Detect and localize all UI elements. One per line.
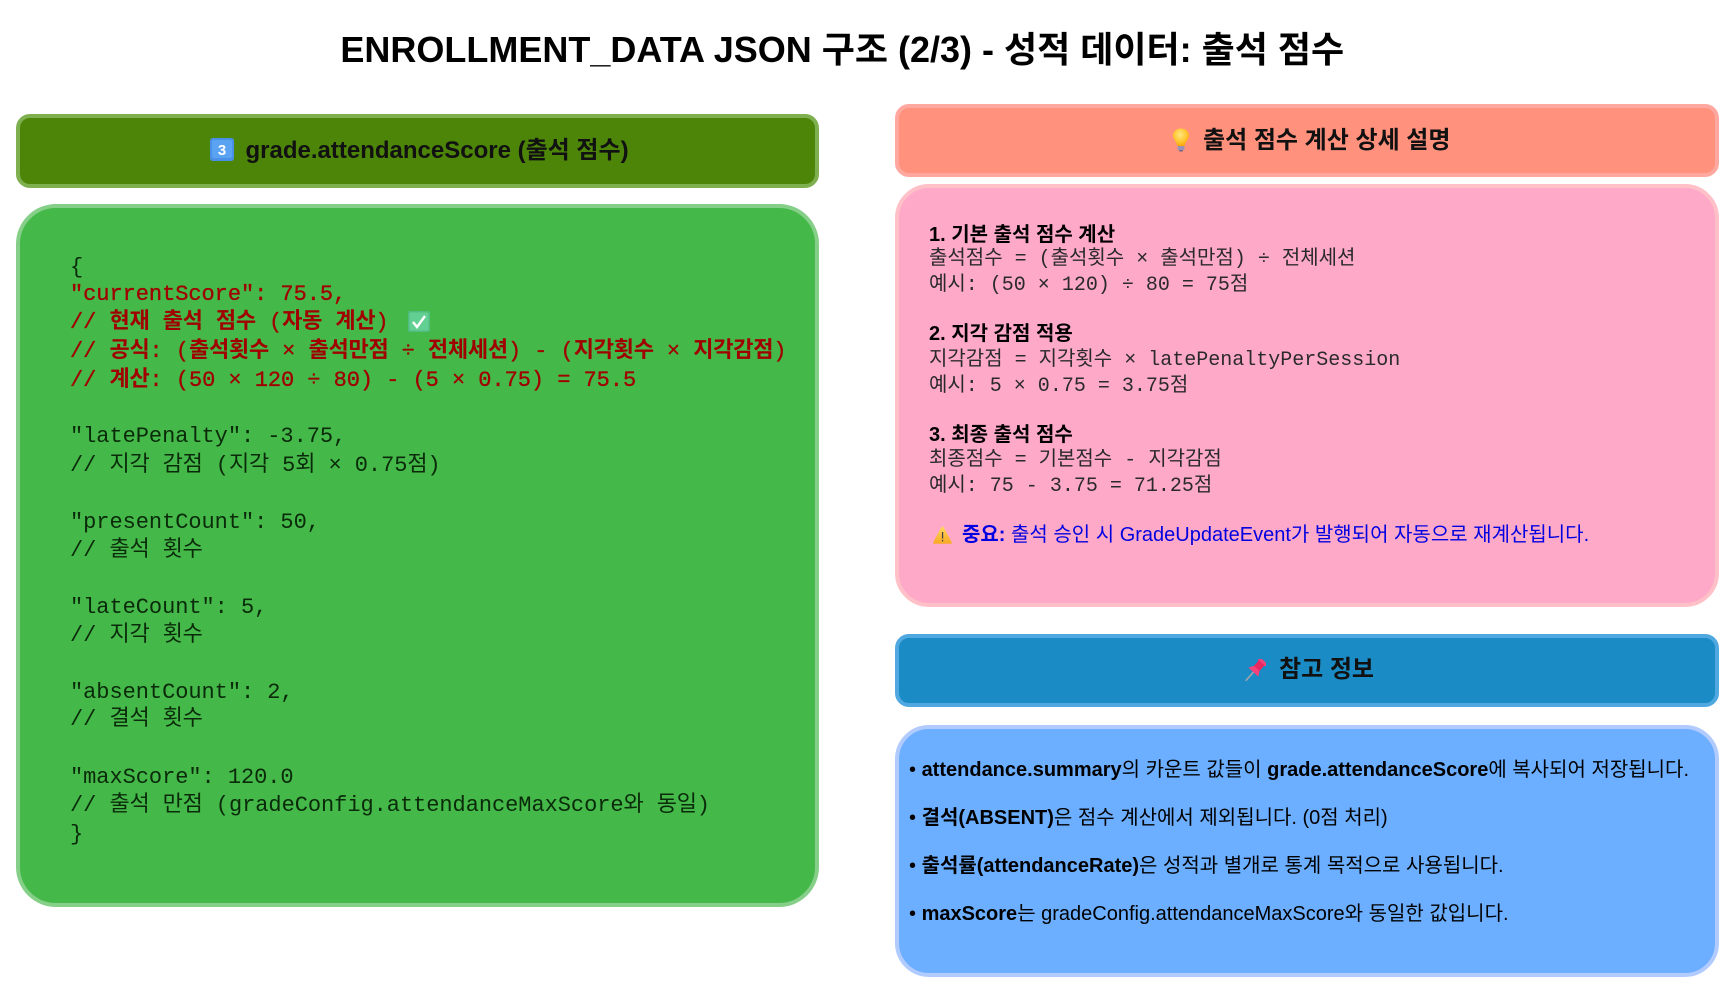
text block: calculation steps: 최종점수 = 기본점수 - 지각감점 xyxy=(929,449,1222,472)
code block: attendance score JSON: // 지각 횟수 xyxy=(70,623,203,648)
panel header: reference info xyxy=(895,634,1719,707)
code block: attendance score JSON xyxy=(70,255,786,847)
code block: attendance score JSON: "latePenalty": -3.75, xyxy=(70,424,346,449)
text block: calculation steps: 1. 기본 출석 점수 계산 xyxy=(929,224,1115,246)
heading: calculation details: 출석 점수 계산 상세 설명 xyxy=(1203,126,1450,154)
code block: attendance score JSON: // 결석 횟수 xyxy=(70,707,203,732)
code block: attendance score JSON: // 공식: (출석횟수 × 출석만점 ÷ 전체세션) - (지각횟수 × 지각감점) xyxy=(70,339,786,364)
heading: reference info: 참고 정보 xyxy=(1279,656,1374,683)
icon: keycap 3: 3 xyxy=(218,142,226,159)
text block: calculation steps: 3. 최종 출석 점수 xyxy=(929,424,1073,446)
code block: attendance score JSON: "lateCount": 5, xyxy=(70,595,267,620)
list: reference notes xyxy=(909,759,1689,925)
text block: calculation steps: 예시: (50 × 120) ÷ 80 = 75점 xyxy=(929,274,1248,297)
text block: calculation steps: 지각감점 = 지각횟수 × latePenaltyPerSession xyxy=(929,349,1400,372)
text block: calculation steps: 예시: 75 - 3.75 = 71.25점 xyxy=(929,475,1212,498)
code block: attendance score JSON: { xyxy=(70,255,83,280)
icon: light bulb xyxy=(1173,128,1189,152)
panel: calculation details xyxy=(895,184,1719,607)
panel: JSON code xyxy=(16,204,819,907)
code block: attendance score JSON: // 현재 출석 점수 (자동 계산) xyxy=(70,310,388,335)
code block: attendance score JSON: // 계산: (50 × 120 ÷ 80) - (5 × 0.75) = 75.5 xyxy=(70,368,636,393)
list: reference notes: • maxScore는 gradeConfig.attendanceMaxScore와 동일한 값입니다. xyxy=(909,903,1509,925)
panel: reference info xyxy=(895,724,1719,977)
title: ENROLLMENT_DATA JSON 구조 (2/3) - 성적 데이터: 출석 점수 xyxy=(340,29,1344,70)
text block: calculation steps: 예시: 5 × 0.75 = 3.75점 xyxy=(929,375,1188,398)
list: reference notes: • 출석률(attendanceRate)은 성적과 별개로 통계 목적으로 사용됩니다. xyxy=(909,855,1504,877)
code block: attendance score JSON: } xyxy=(70,822,83,847)
list: reference notes: • attendance.summary의 카운트 값들이 grade.attendanceScore에 복사되어 저장됩니다. xyxy=(909,759,1689,781)
heading: grade.attendanceScore: grade.attendanceScore (출석 점수) xyxy=(246,137,629,164)
code block: attendance score JSON: "currentScore": 75.5, xyxy=(70,282,346,307)
icon: keycap 3 xyxy=(210,138,234,161)
icon: check mark xyxy=(408,311,430,332)
text block: calculation steps: 2. 지각 감점 적용 xyxy=(929,323,1073,345)
code block: attendance score JSON: // 지각 감점 (지각 5회 × 0.75점) xyxy=(70,453,441,478)
icon: pushpin xyxy=(1245,659,1266,682)
icon: warning xyxy=(933,526,952,544)
text block: calculation steps: 중요: 출석 승인 시 GradeUpdateEvent가 발행되어 자동으로 재계산됩니다. xyxy=(962,524,1589,546)
text block: calculation steps: 출석점수 = (출석횟수 × 출석만점) ÷ 전체세션 xyxy=(929,248,1355,271)
panel header: grade.attendanceScore xyxy=(16,114,819,188)
text block: calculation steps xyxy=(929,224,1589,546)
code block: attendance score JSON: // 출석 횟수 xyxy=(70,538,203,563)
list: reference notes: • 결석(ABSENT)은 점수 계산에서 제외됩니다. (0점 처리) xyxy=(909,807,1388,829)
code block: attendance score JSON: // 출석 만점 (gradeConfig.attendanceMaxScore와 동일) xyxy=(70,793,710,818)
code block: attendance score JSON: "presentCount": 50, xyxy=(70,510,320,535)
code block: attendance score JSON: "absentCount": 2, xyxy=(70,680,294,705)
code block: attendance score JSON: "maxScore": 120.0 xyxy=(70,765,294,790)
panel header: calculation details xyxy=(895,104,1719,177)
